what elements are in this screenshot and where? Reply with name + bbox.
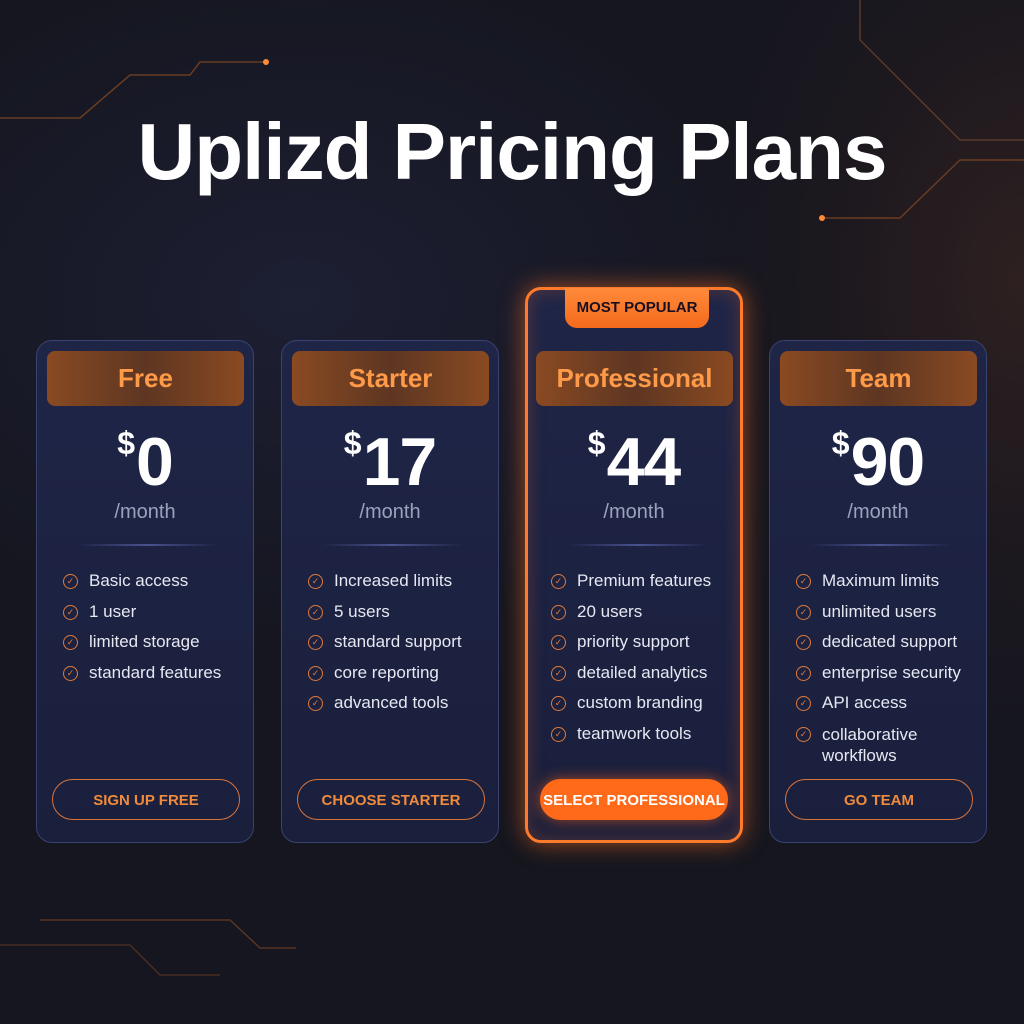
- panel: Professional: custom branding: [577, 693, 703, 712]
- panel: Professional: Premium features: [577, 571, 711, 590]
- panel: Starter: Increased limits: [334, 571, 452, 590]
- panel: Professional: detailed analytics: [577, 662, 707, 682]
- panel: Team: GO TEAM: [844, 792, 914, 809]
- panel: Professional: 20 users: [577, 602, 642, 620]
- panel: Team: /month: [847, 501, 909, 523]
- panel: Starter: standard support: [334, 632, 462, 651]
- panel: Starter: [281, 340, 499, 843]
- panel: Professional: priority support: [577, 632, 689, 651]
- panel: Free: Basic access: [89, 571, 188, 590]
- panel: Starter: Starter: [349, 363, 432, 393]
- panel: Free: Free: [118, 363, 173, 393]
- panel: Free: standard features: [89, 662, 221, 682]
- panel: Team: unlimited users: [822, 602, 936, 620]
- panel: Team: dedicated support: [822, 632, 957, 651]
- panel: Starter: $17: [344, 424, 436, 500]
- panel: Team: Team: [846, 363, 912, 393]
- panel: Free: [36, 340, 254, 843]
- panel: Free: 1 user: [89, 602, 136, 620]
- panel: Free: limited storage: [89, 632, 200, 651]
- panel: Professional: teamwork tools: [577, 724, 691, 742]
- panel: Starter: /month: [359, 501, 421, 523]
- title: Uplizd Pricing Plans: [137, 107, 887, 196]
- panel: Starter: 5 users: [334, 602, 390, 620]
- panel: Free: /month: [114, 501, 176, 523]
- panel: Professional: SELECT PROFESSIONAL: [543, 792, 725, 809]
- panel: Professional: [525, 287, 743, 843]
- panel: Team: collaborative: [822, 724, 917, 744]
- panel: Starter: advanced tools: [334, 693, 448, 712]
- panel: Professional: /month: [603, 501, 665, 523]
- panel: Team: Maximum limits: [822, 571, 939, 590]
- panel: Team: workflows: [822, 746, 897, 764]
- panel: Free: $0: [117, 424, 173, 500]
- panel: Free: SIGN UP FREE: [93, 792, 199, 809]
- panel: Starter: CHOOSE STARTER: [322, 792, 460, 809]
- panel: Team: [769, 340, 987, 843]
- panel: Team: $90: [832, 424, 924, 500]
- panel: Professional: $44: [588, 424, 680, 500]
- panel: Professional: MOST POPULAR: [577, 299, 697, 316]
- panel: Team: enterprise security: [822, 662, 961, 682]
- panel: Starter: core reporting: [334, 662, 439, 682]
- panel: Professional: Professional: [556, 363, 713, 393]
- panel: Team: API access: [822, 693, 907, 712]
